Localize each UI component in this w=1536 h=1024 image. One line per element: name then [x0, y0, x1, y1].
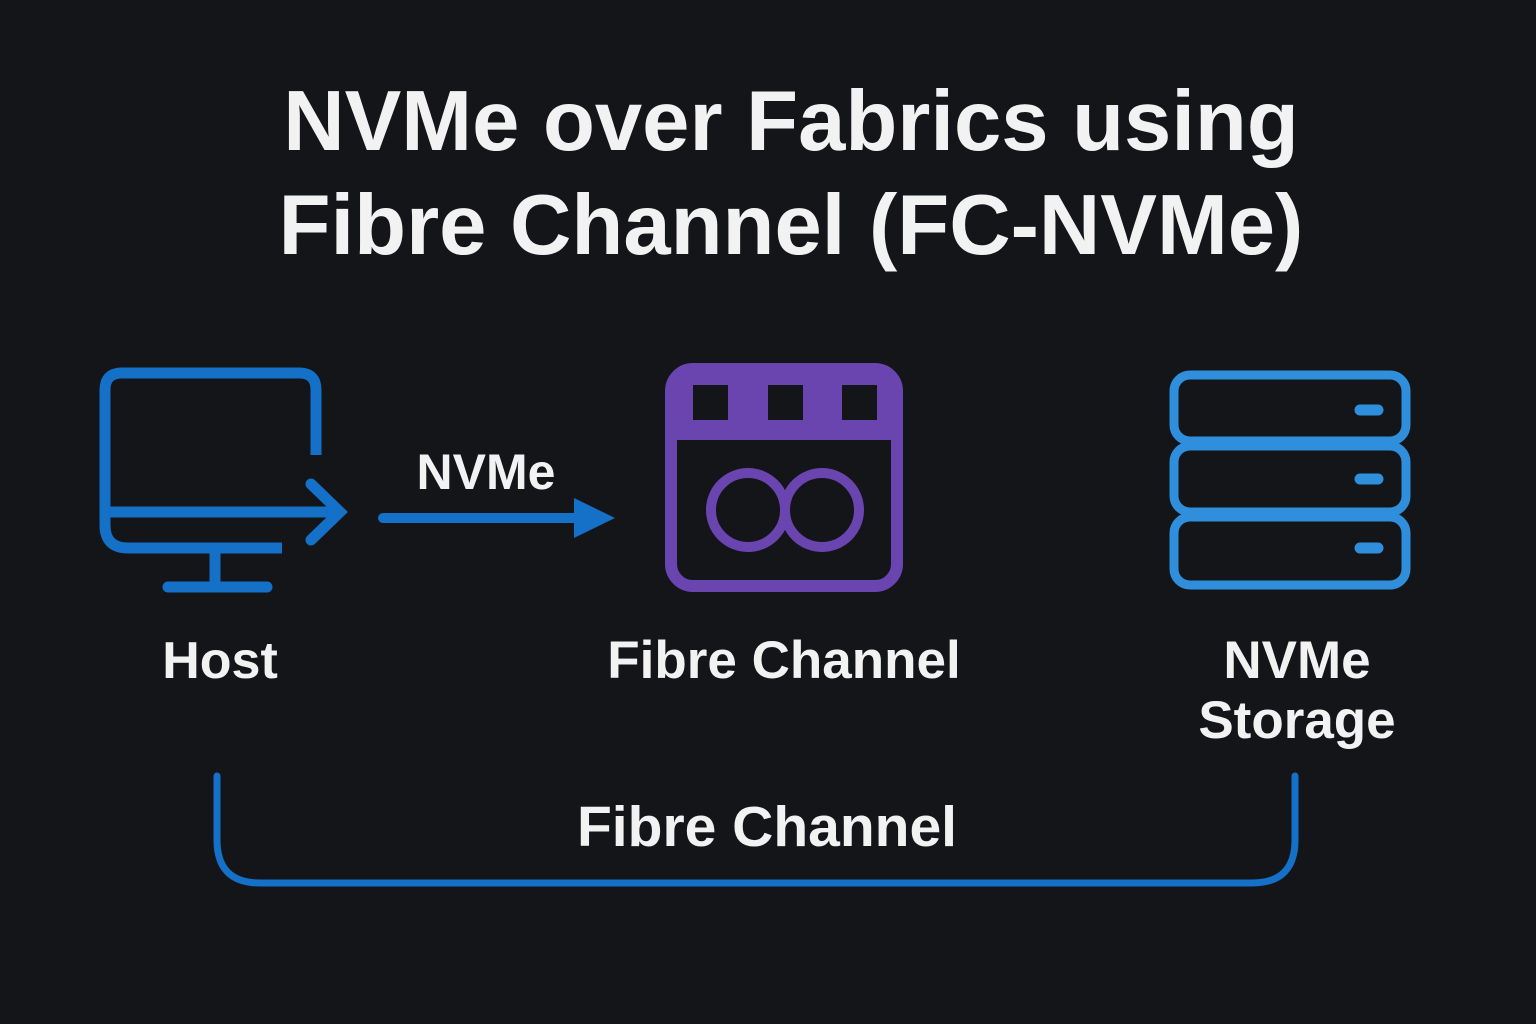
- icon: fibre channel switch: [671, 369, 897, 586]
- label: NVMe Storage: Storage: [1198, 691, 1396, 750]
- label: Host: Host: [162, 632, 278, 690]
- label: NVMe: NVMe: [417, 444, 555, 500]
- title: NVMe over Fabrics using: [283, 74, 1299, 169]
- label: bottom Fibre Channel: Fibre Channel: [577, 795, 957, 859]
- label: NVMe Storage: NVMe: [1223, 631, 1371, 690]
- title: Fibre Channel (FC-NVMe): [279, 178, 1303, 273]
- bracket: fibre channel link: [217, 776, 1295, 883]
- arrow: NVMe: [383, 498, 615, 538]
- icon: NVMe storage: [1174, 375, 1406, 585]
- label: Fibre Channel: Fibre Channel: [607, 631, 961, 690]
- icon: host monitor: [105, 373, 340, 587]
- title: [279, 74, 1303, 273]
